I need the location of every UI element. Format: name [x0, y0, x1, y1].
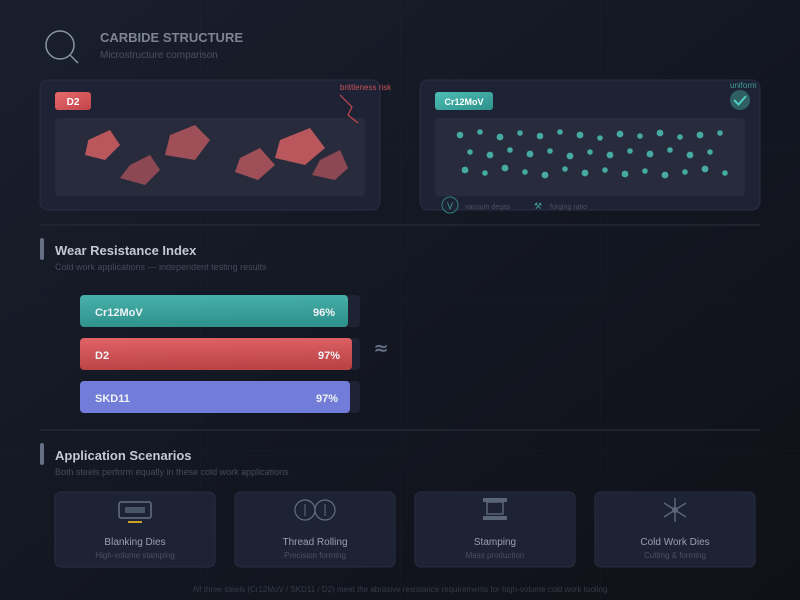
section heading: Wear Resistance Index: Cold work applications — independent testing results	[55, 262, 267, 272]
card: Stamping	[415, 492, 575, 567]
subtitle: Microstructure comparison	[100, 50, 218, 61]
note: vacuum degas: V	[447, 201, 453, 211]
section heading: Application Scenarios	[40, 443, 289, 477]
icon: uniform check: uniform	[730, 81, 757, 90]
icon: uniform check	[730, 81, 757, 110]
card: Thread Rolling: Thread Rolling	[282, 537, 348, 548]
icon: cutting star	[664, 498, 686, 522]
badge: D2: D2	[67, 97, 80, 108]
bar: Cr12MoV 96%: 96%	[313, 307, 335, 319]
bar: SKD11 97%	[80, 381, 360, 413]
bar: SKD11 97%: 97%	[316, 393, 338, 405]
card: Blanking Dies	[55, 492, 215, 567]
icon: stamping press	[483, 498, 507, 520]
section heading: Application Scenarios: Both steels perform equally in these cold work applications	[55, 467, 289, 477]
card: Cold Work Dies	[595, 492, 755, 567]
section heading: Wear Resistance Index	[40, 238, 267, 272]
panel: Cr12MoV carbide structure	[420, 80, 760, 213]
approximately equal symbol: ≈	[373, 338, 389, 359]
callout: brittleness risk crack: brittleness risk	[340, 83, 392, 92]
card: Thread Rolling	[235, 492, 395, 567]
card: Blanking Dies: Blanking Dies	[104, 537, 166, 548]
icon: thread rollers	[295, 500, 335, 520]
note: vacuum degas: vacuum degas	[465, 204, 511, 211]
badge: Cr12MoV	[435, 92, 493, 110]
card: Blanking Dies: High-volume stamping	[95, 551, 175, 560]
micrograph: fine uniform carbides	[435, 118, 745, 196]
bar: D2 97%: 97%	[318, 350, 340, 362]
section heading: Application Scenarios: Application Scenarios	[55, 448, 192, 463]
badge: Cr12MoV: Cr12MoV	[444, 97, 484, 107]
icon: magnifying glass	[46, 31, 78, 63]
card: Stamping: Stamping	[474, 537, 516, 548]
title: CARBIDE STRUCTURE	[100, 30, 243, 45]
footer note: All three steels (Cr12MoV / SKD11 / D2) meet the abrasive resistance requirements for high-volume cold work tooling	[193, 585, 607, 594]
card: Cold Work Dies: Cold Work Dies	[640, 537, 710, 548]
micrograph: large irregular carbides	[55, 118, 365, 196]
note: forging ratio	[534, 202, 587, 212]
bar: D2 97%: D2	[95, 350, 109, 362]
note: vacuum degas	[442, 197, 511, 213]
icon: blanking die	[119, 502, 151, 523]
bar: Cr12MoV 96%	[80, 295, 360, 327]
bar: Cr12MoV 96%: Cr12MoV	[95, 307, 143, 319]
badge: D2	[55, 92, 91, 110]
section heading: Wear Resistance Index: Wear Resistance Index	[55, 243, 197, 258]
bar: D2 97%	[80, 338, 360, 370]
card: Thread Rolling: Precision forming	[284, 551, 346, 560]
callout: brittleness risk crack	[340, 83, 392, 123]
card: Stamping: Mass production	[466, 551, 524, 560]
note: forging ratio: ⚒	[534, 202, 542, 212]
bar chart: wear resistance	[80, 295, 360, 413]
card: Cold Work Dies: Cutting & forming	[644, 551, 706, 560]
panel: D2 carbide structure	[40, 80, 392, 210]
note: forging ratio: forging ratio	[550, 204, 587, 211]
bar: SKD11 97%: SKD11	[95, 393, 130, 405]
